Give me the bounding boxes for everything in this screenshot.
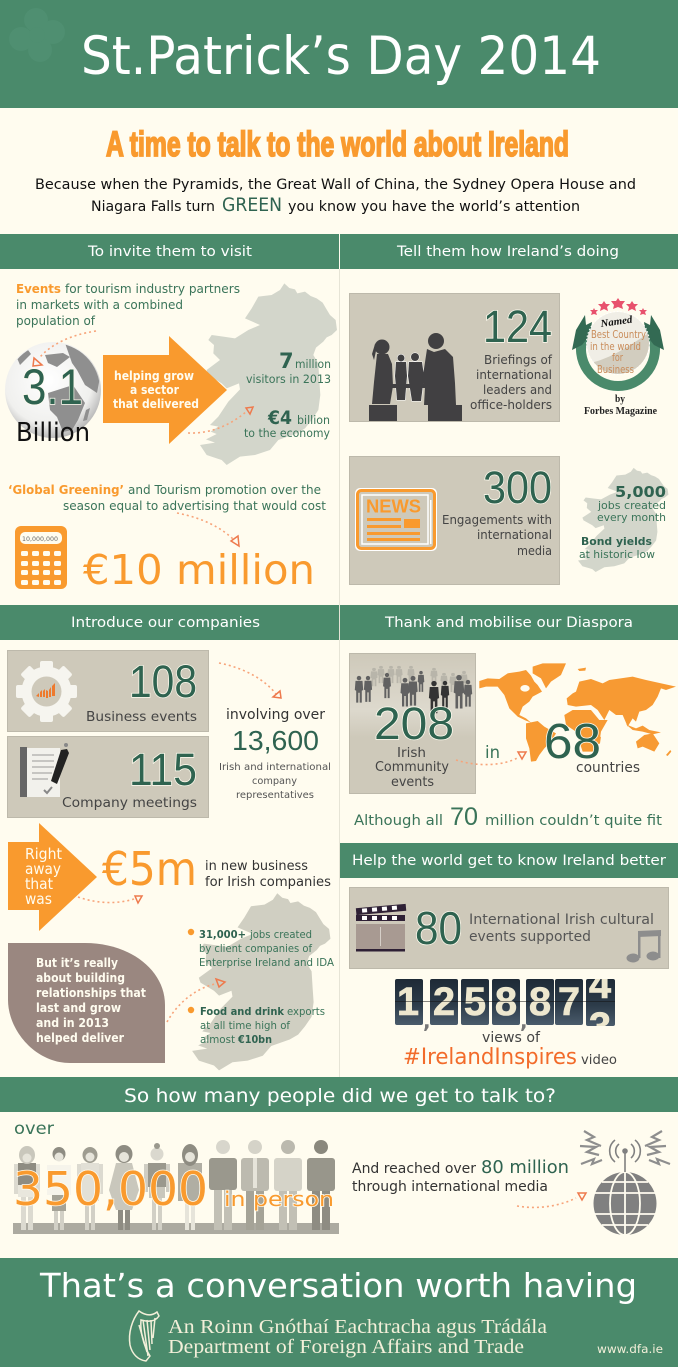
text: events for tourism: in markets with a combined: [16, 298, 183, 312]
text: global greening: ‘Global Greening’: [8, 483, 124, 497]
number: 115: 115: [129, 744, 197, 795]
text: 80 million media: through international media: [352, 1179, 548, 1195]
intro text: you know you have the world’s attention: [288, 199, 580, 215]
text: engagements: [442, 512, 552, 558]
text: involving over 13,600: representatives: [236, 790, 314, 801]
text: events for tourism: for tourism industry partners: [65, 282, 240, 296]
section header: to invite them to visit: [0, 234, 339, 269]
footer banner: [0, 1258, 678, 1367]
website: www.dfa.ie: [597, 1342, 663, 1356]
icon: shamrock: [9, 8, 65, 62]
stat: 7 million visitors: [246, 349, 331, 386]
badge: best country for business: in the world: [590, 340, 641, 353]
number: 300: 300: [483, 462, 552, 513]
map: Ireland tourism: [200, 283, 337, 465]
bullet: jobs created: [188, 929, 335, 969]
arrow: to involving over: [219, 663, 281, 698]
flip counter: 1,258,874: 7: [558, 980, 580, 1024]
section header: introduce our companies: [0, 605, 339, 640]
icon: crowd silhouettes: [355, 666, 472, 713]
stat: 4 billion to the economy: [244, 407, 330, 440]
flip counter: 1,258,874: 5: [464, 980, 486, 1024]
badge: best country for business: by: [615, 394, 626, 405]
stat: 7 million visitors: visitors in 2013: [246, 372, 331, 386]
bullet: food and drink exports: [188, 1006, 325, 1046]
text: briefings: international: [476, 367, 552, 382]
panel: cultural events: [350, 888, 668, 968]
department name: [168, 1316, 547, 1358]
text: although all 70 million: [354, 803, 662, 831]
text: global greening: and Tourism promotion over the: [128, 483, 321, 497]
text: irish community events: Irish: [397, 746, 426, 761]
flip counter: 1,258,874: [395, 979, 615, 1031]
section header: introduce our companies: Introduce our companies: [71, 615, 260, 631]
flip counter: 1,258,874: 8: [529, 980, 551, 1024]
icon: globe with 3.1 billion: 3.1: [22, 359, 83, 415]
map: Ireland with jobs and bonds: jobs created: [597, 499, 666, 512]
text: over: over: [14, 1119, 54, 1139]
badge: best country for business: Named: [599, 315, 634, 330]
bullet: food and drink exports: almost: [200, 1034, 235, 1046]
text: although all 70 million: Although all: [354, 813, 443, 829]
icon: gear: [16, 661, 77, 722]
flip counter: 1,258,874: ,: [423, 1009, 431, 1033]
section header: thank and mobilise: [340, 605, 678, 640]
map: Ireland with jobs and bonds: at historic low: [579, 548, 655, 561]
arrow: to world map: [456, 752, 526, 765]
bullet: food and drink exports: €10bn: [237, 1034, 272, 1046]
orange arrow: right away that was: [8, 823, 97, 931]
text: briefings: [470, 352, 553, 412]
section header: tell them how Ireland's doing: [340, 234, 678, 269]
orange arrow: right away that was: was: [25, 890, 52, 908]
section header: to invite them to visit: To invite them to visit: [87, 244, 252, 260]
number: 108: 108: [129, 656, 197, 707]
flip counter: 1,258,874: 1: [397, 980, 419, 1024]
callout: building relationships: about building: [36, 971, 125, 985]
bullet: jobs created: by client companies of: [199, 943, 312, 955]
text: involving over 13,600: Irish and international: [219, 762, 331, 773]
icon: calculator: [15, 526, 67, 589]
intro text: [35, 177, 636, 216]
bullet: jobs created: Enterprise Ireland and IDA: [199, 957, 335, 969]
text: cultural events: events supported: [469, 929, 591, 945]
header banner: [0, 0, 678, 108]
section header: thank and mobilise: Thank and mobilise our Diaspora: [384, 615, 633, 631]
text: engagements: Engagements with: [442, 512, 552, 527]
number: 68 countries: 68: [544, 715, 601, 769]
flip counter: 1,258,874: ,: [520, 1009, 528, 1033]
icon: globe with 3.1 billion: Billion: [16, 418, 90, 448]
callout: building relationships: last and grow: [36, 1001, 121, 1015]
text: cultural events: International Irish cultural: [469, 912, 654, 928]
stat: 7 million visitors: million: [295, 357, 331, 371]
title: St.Patrick’s Day 2014: [81, 26, 601, 87]
icon: calculator: 10,000,000: [22, 536, 58, 543]
bullet: food and drink exports: Food and drink: [200, 1006, 285, 1018]
map: Ireland with jobs and exports: [192, 893, 330, 1070]
map: Ireland with jobs and bonds: every month: [597, 511, 666, 524]
text: irish community events: [375, 746, 449, 790]
text: irish community events: events: [391, 775, 434, 790]
arrow: to radio globe: [517, 1193, 586, 1207]
text: company meetings: Company meetings: [62, 795, 197, 811]
callout: building relationships: [8, 943, 165, 1063]
bullet: jobs created: jobs created: [249, 929, 312, 941]
text: briefings: leaders and: [483, 382, 552, 397]
arrow: to 10 million: [177, 513, 239, 546]
intro text: GREEN: [222, 194, 282, 216]
map: Ireland with jobs and bonds: Bond yields: [581, 535, 652, 548]
text: cultural events: [469, 912, 654, 945]
arrow: to 5m: [78, 896, 142, 903]
icon: globe with 3.1 billion: [5, 342, 101, 448]
text: events for tourism: population of: [16, 314, 96, 328]
bullet: food and drink exports: at all time high of: [200, 1020, 290, 1032]
orange arrow: helping grow: a sector: [130, 383, 179, 397]
number: 80: 80: [415, 902, 462, 954]
text: involving over 13,600: company: [252, 776, 297, 787]
callout: building relationships: and in 2013: [36, 1016, 109, 1030]
number: 208: 208: [374, 698, 454, 749]
panel: briefings: [350, 294, 560, 422]
flip counter: 1,258,874: 3: [589, 1005, 611, 1049]
panel: community events: [350, 654, 476, 794]
panel: business events: [8, 650, 208, 732]
stat: 4 billion to the economy: billion: [297, 413, 330, 427]
orange arrow: helping grow: [103, 336, 227, 444]
stat: 7 million visitors: 7: [279, 349, 294, 373]
text: events for tourism: Events: [16, 282, 61, 296]
icon: music note: [626, 930, 661, 962]
text: views of hashtag: #IrelandInspires: [403, 1045, 577, 1070]
text: 80 million media: [352, 1157, 569, 1195]
orange arrow: right away that was: away: [25, 860, 61, 878]
callout: building relationships: helped deliver: [36, 1031, 124, 1045]
text: global greening: [8, 483, 326, 513]
world map: [479, 663, 676, 762]
text: engagements: international: [477, 527, 552, 542]
text: 80 million media: 80 million: [481, 1157, 569, 1178]
text: views of hashtag: views of: [482, 1030, 541, 1046]
text: business events: Business events: [86, 709, 197, 725]
flip counter: 1,258,874: 2: [433, 980, 455, 1024]
map: Ireland with jobs and bonds: 5,000: [615, 483, 666, 501]
orange arrow: helping grow: that delivered: [113, 397, 199, 411]
section header: tell them how Ireland's doing: Tell them how Ireland’s doing: [396, 244, 619, 260]
icon: broadcast globe: [580, 1131, 670, 1235]
number: 68 countries: countries: [576, 760, 640, 776]
stat: 350,000 in person: 350,000: [13, 1162, 208, 1216]
section header: so how many people: So how many people did we get to talk to?: [124, 1085, 556, 1107]
badge: best country for business: Forbes Magazine: [584, 406, 657, 417]
orange arrow: helping grow: helping grow: [114, 369, 194, 383]
text: although all 70 million: million couldn’t quite fit: [485, 813, 662, 829]
badge: best country for business: Business: [597, 363, 634, 376]
department name: Department of Foreign Affairs and Trade: [168, 1336, 524, 1358]
text: involving over 13,600: involving over: [226, 707, 325, 723]
bullet: food and drink exports: exports: [287, 1006, 325, 1018]
text: global greening: season equal to advertising that would cost: [63, 499, 326, 513]
stat: 350,000 in person: [13, 1162, 334, 1216]
arrow: to map: [188, 407, 253, 433]
badge: best country for business: [572, 298, 664, 417]
text: briefings: office-holders: [470, 397, 552, 412]
icon: news: NEWS: [366, 496, 421, 516]
panel: engagements: [350, 456, 560, 584]
stat: 10 million: €10 million: [83, 546, 315, 594]
badge: best country for business: for: [612, 351, 623, 364]
arrow: events to globe: [33, 331, 96, 366]
bullet: jobs created: 31,000+: [199, 929, 246, 941]
flip counter: 1,258,874: 4: [589, 963, 612, 1007]
intro text: Niagara Falls turn: [91, 199, 215, 215]
text: views of hashtag: video: [581, 1053, 617, 1068]
illustration: row of people: [13, 1140, 339, 1234]
orange arrow: right away that was: Right: [25, 845, 62, 863]
icon: harp: [129, 1311, 159, 1361]
text: involving over 13,600: [219, 707, 331, 801]
stat: 4 billion to the economy: to the economy: [244, 426, 330, 440]
text: views of hashtag: [403, 1030, 617, 1070]
text: irish community events: Community: [375, 760, 449, 775]
text: although all 70 million: 70: [450, 803, 478, 831]
text: in: in: [485, 743, 500, 763]
text: events for tourism: [16, 282, 240, 328]
section header: help the world: Help the world get to know Ireland better: [352, 853, 666, 869]
arrow: to Ireland map: [167, 979, 225, 1022]
text: in new business: [205, 859, 331, 890]
stat: 350,000 in person: in person: [224, 1187, 334, 1211]
section header: help the world: [340, 843, 678, 878]
department name: An Roinn Gnóthaí Eachtracha agus Trádála: [168, 1316, 547, 1338]
text: 80 million media: And reached over: [352, 1161, 476, 1177]
closing headline: That’s a conversation worth having: [39, 1266, 637, 1305]
text: engagements: media: [517, 543, 552, 558]
icon: notebook and pen: [20, 743, 69, 797]
callout: building relationships: relationships that: [36, 986, 146, 1000]
flip counter: 1,258,874: 8: [495, 980, 517, 1024]
orange arrow: right away that was: that: [25, 875, 53, 893]
icon: news: [355, 488, 437, 551]
text: in new business: in new business: [205, 859, 308, 874]
badge: best country for business: Best Country: [591, 328, 646, 341]
icon: business people silhouettes: [369, 333, 462, 421]
intro text: Because when the Pyramids, the Great Wall of China, the Sydney Opera House and: [35, 177, 636, 193]
stat: 4 billion to the economy: €4: [267, 407, 292, 429]
stat: 5m: €5m: [102, 842, 197, 896]
callout: building relationships: But it’s really: [36, 956, 118, 970]
number: 68 countries: [544, 715, 640, 776]
icon: clapperboard: [356, 904, 406, 952]
section header: so how many people: [0, 1077, 678, 1112]
text: briefings: Briefings of: [484, 352, 553, 367]
panel: company meetings: [8, 736, 208, 818]
text: involving over 13,600: 13,600: [232, 725, 319, 756]
map: Ireland with jobs and bonds: [578, 468, 668, 572]
number: 124: 124: [483, 301, 552, 352]
text: in new business: for Irish companies: [205, 875, 331, 890]
